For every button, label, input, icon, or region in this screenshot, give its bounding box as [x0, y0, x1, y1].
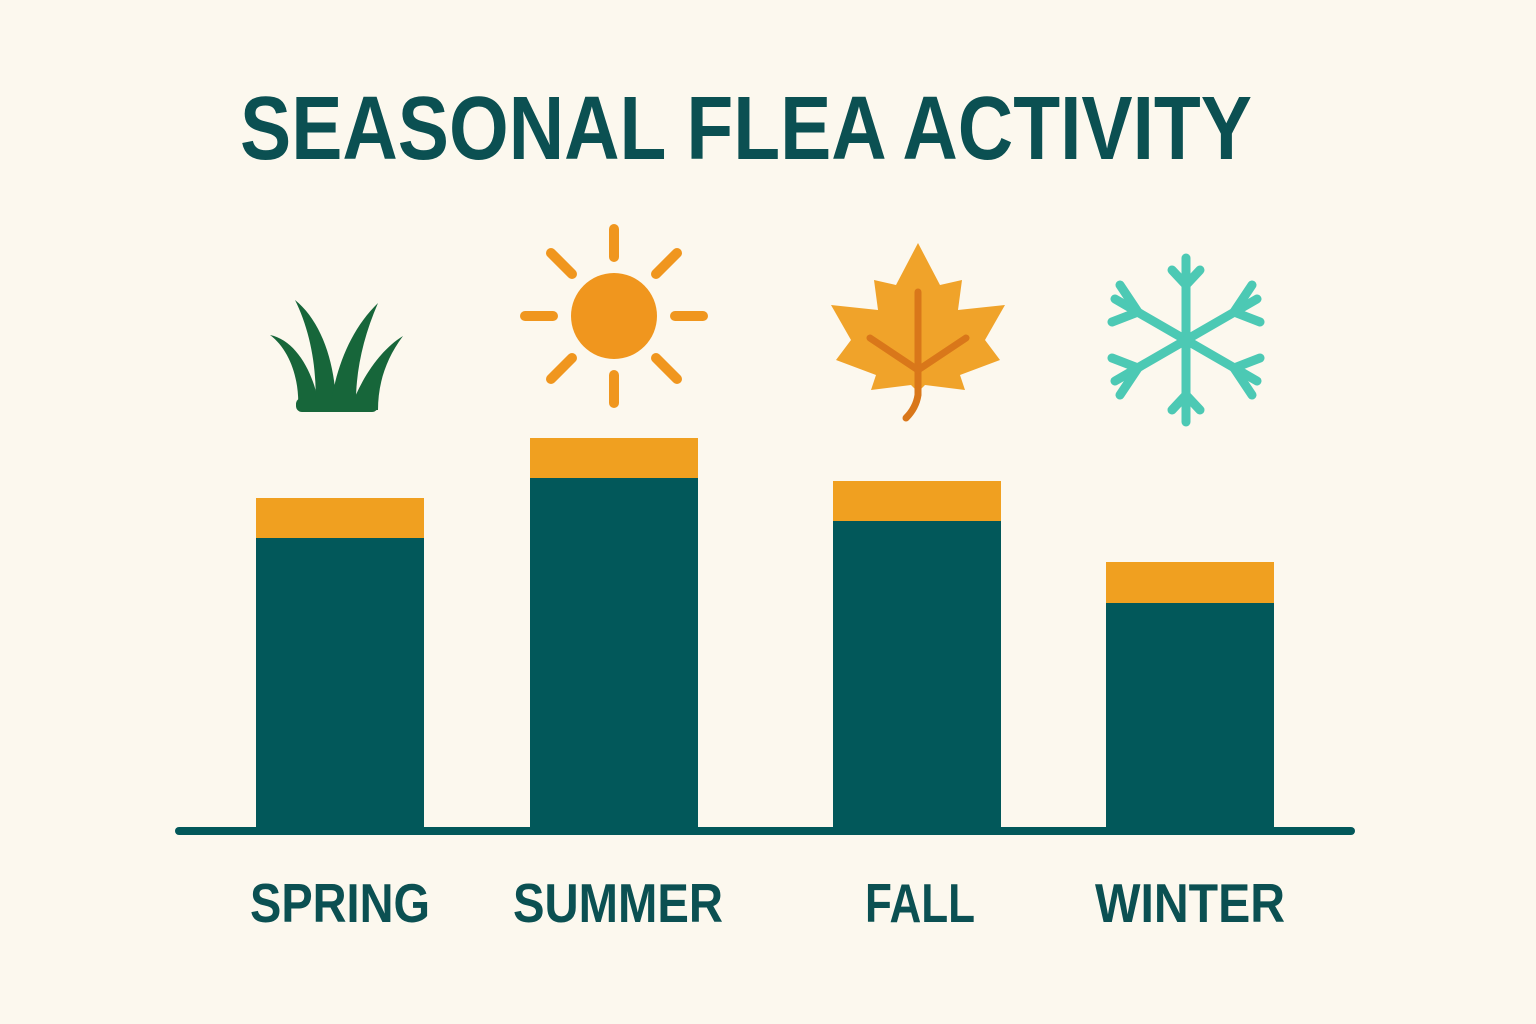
icon: sun	[525, 229, 703, 403]
title: SEASONAL FLEA ACTIVITY	[240, 79, 1252, 179]
labels	[250, 872, 1285, 934]
labels: SPRING	[250, 872, 430, 934]
icon: snowflake	[1112, 258, 1260, 422]
icon: leaf	[831, 243, 1005, 418]
bar chart	[179, 438, 1351, 832]
bar: fall	[833, 481, 1001, 832]
bar: spring	[256, 498, 424, 832]
labels: FALL	[865, 872, 975, 934]
labels: WINTER	[1095, 872, 1285, 934]
axis	[179, 827, 1351, 835]
bar: summer	[530, 438, 698, 832]
bar: winter	[1106, 562, 1274, 832]
icon: grass	[270, 300, 403, 412]
labels: SUMMER	[513, 872, 723, 934]
